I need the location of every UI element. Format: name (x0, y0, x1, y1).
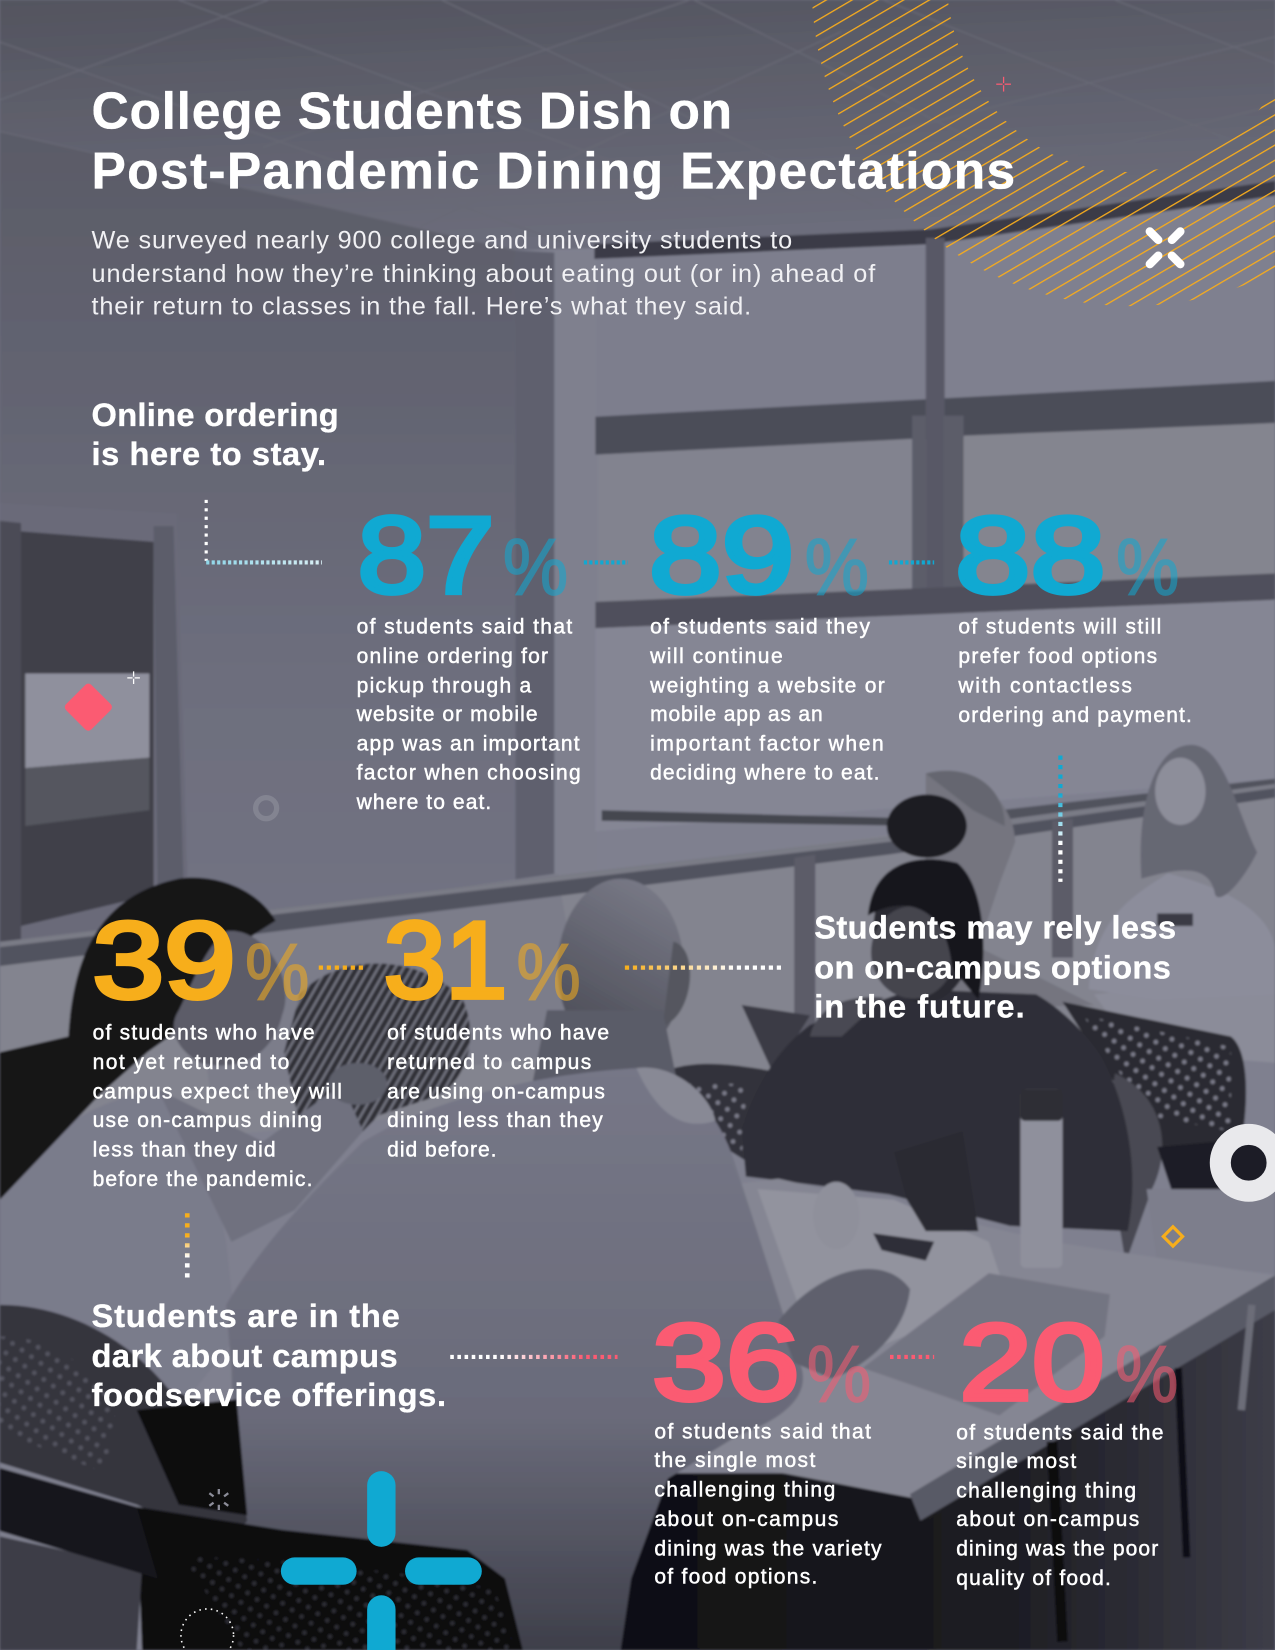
floor (589, 1294, 1275, 1650)
connector: 36 to 20 (890, 1355, 934, 1359)
stat: 39 percent (93, 900, 342, 1191)
central shirt (226, 1068, 803, 1650)
stat: 36 percent: about on-campus (654, 1508, 838, 1531)
stat: 87 percent: of students said that (357, 615, 572, 638)
stat: 31 percent (384, 900, 609, 1161)
stat: 39 percent: of students who have (93, 1022, 315, 1045)
connector: 89 to 88 (889, 560, 934, 564)
heading: foodservice offerings: foodservice offerings. (92, 1376, 446, 1413)
stat: 89 percent: % (805, 523, 869, 612)
stat: 20 percent: dining was the poor (956, 1537, 1158, 1560)
stat: 89 percent: will continue (649, 645, 783, 668)
table (771, 1177, 1130, 1500)
heading: foodservice offerings: Students are in the (92, 1297, 400, 1334)
stat: 87 percent: factor when choosing (357, 762, 581, 785)
decor: white crosshair (127, 671, 140, 684)
stat: 31 percent: % (517, 928, 581, 1017)
left chair (0, 1305, 247, 1547)
stat: 88 percent: 88 (955, 494, 1106, 615)
stat: 36 percent: of food options. (654, 1566, 817, 1589)
stat: 31 percent: 31 (384, 900, 507, 1021)
stat: 87 percent: 87 (358, 494, 494, 615)
left student (48, 1091, 180, 1152)
stat: 39 percent: before the pandemic. (93, 1168, 312, 1191)
bald man (557, 878, 682, 1029)
stat: 39 percent: not yet returned to (93, 1051, 289, 1074)
stat: 89 percent: important factor when (650, 732, 884, 755)
stat: 88 percent: of students will still (958, 615, 1161, 638)
connector: heading to 36 percent (450, 1355, 618, 1359)
stat: 31 percent: dining less than they (387, 1109, 603, 1132)
stat: 20 percent: quality of food. (956, 1567, 1111, 1590)
stat: 89 percent: deciding where to eat. (650, 762, 879, 785)
intro text: their return to classes in the fall. Here’s what they said. (92, 293, 751, 321)
decor: gray star burst (209, 1489, 228, 1510)
heading: on-campus options: Students may rely less (814, 909, 1176, 946)
decor: dotted circle (181, 1609, 234, 1650)
stat: 89 percent: mobile app as an (650, 703, 823, 726)
stat: 87 percent: website or mobile (356, 703, 538, 726)
heading: on-campus options: on on-campus options (814, 949, 1171, 986)
left wall (0, 132, 516, 910)
lower window panes (682, 438, 913, 451)
seat back lower (137, 1507, 523, 1650)
stat: 87 percent: where to eat. (356, 791, 491, 814)
stat: 87 percent (356, 494, 581, 814)
decor: faint ring (256, 798, 277, 819)
stat: 89 percent (649, 494, 885, 785)
decor: pink diamond (63, 682, 114, 732)
stat: 20 percent: about on-campus (956, 1508, 1139, 1531)
hand rail (0, 784, 1275, 966)
stat: 89 percent: weighting a website or (649, 674, 885, 697)
main window transom (595, 381, 1275, 455)
icon: blue plus mark (281, 1471, 482, 1650)
heading: online ordering: is here to stay. (92, 435, 326, 472)
stat: 31 percent: did before. (387, 1138, 497, 1161)
stat: 20 percent: single most (956, 1450, 1076, 1473)
headwrap (284, 963, 470, 1147)
stat: 31 percent: returned to campus (387, 1051, 591, 1074)
stat: 87 percent: pickup through a (357, 674, 532, 697)
ponytail student (926, 772, 1094, 1010)
ceiling (0, 0, 1275, 250)
stat: 36 percent (652, 1302, 882, 1589)
heading: online ordering: Online ordering (92, 396, 339, 433)
stat: 39 percent: 39 (93, 900, 236, 1021)
title: College Students Dish on (92, 81, 732, 139)
title (92, 81, 1015, 199)
decor: pink crosshair (996, 77, 1011, 92)
stat: 87 percent: % (503, 523, 568, 612)
stat: 20 percent (956, 1302, 1178, 1590)
stat: 36 percent: the single most (654, 1449, 815, 1472)
stat: 20 percent: 20 (959, 1302, 1105, 1423)
heading: foodservice offerings: dark about campus (92, 1337, 398, 1374)
decor: orange diamond outline (1163, 1227, 1183, 1246)
title: Post-Pandemic Dining Expectations (92, 141, 1015, 199)
connector: 31 to heading (625, 966, 784, 970)
stat: 89 percent: 89 (649, 494, 794, 615)
stat: 39 percent: less than they did (93, 1138, 276, 1161)
intro text (92, 226, 876, 321)
intro text: We surveyed nearly 900 college and university students to (92, 226, 792, 254)
intro text: understand how they’re thinking about eating out (or in) ahead of (92, 260, 876, 288)
stat: 39 percent: use on-campus dining (93, 1109, 322, 1132)
stat: 88 percent: with contactless (957, 674, 1132, 697)
connector: 88 down to heading (1058, 756, 1062, 882)
heading: foodservice offerings (92, 1297, 446, 1413)
right floor behind table (1146, 1187, 1275, 1211)
rear table and blonde student (1097, 994, 1274, 1062)
stat: 36 percent: dining was the variety (654, 1537, 882, 1560)
decor: orange striped arc (812, 0, 1275, 306)
upper window panes (596, 247, 926, 419)
stat: 88 percent: prefer food options (958, 645, 1157, 668)
door frame (22, 904, 120, 938)
connector: vertical orange (185, 1213, 189, 1277)
connector: 39 to 31 (319, 966, 366, 970)
wall below railing and glass (0, 800, 1144, 1032)
stat: 87 percent: app was an important (357, 732, 580, 755)
heading: on-campus options: in the future. (814, 988, 1025, 1025)
stat: 31 percent: are using on-campus (387, 1081, 605, 1104)
connector: heading to 87 percent (206, 500, 322, 562)
stat: 20 percent: % (1115, 1330, 1178, 1419)
stat: 39 percent: % (245, 928, 309, 1017)
beam at ceiling (594, 181, 1275, 259)
stat: 36 percent: % (807, 1330, 871, 1419)
decor: large white ring (1220, 1134, 1275, 1191)
stat: 20 percent: of students said the (956, 1422, 1163, 1445)
chairs behind (1062, 1001, 1248, 1148)
connector: 87 to 89 (584, 560, 628, 564)
stat: 31 percent: of students who have (387, 1022, 609, 1045)
stat: 87 percent: online ordering for (357, 645, 548, 668)
sill (595, 574, 1275, 628)
heading: on-campus options (814, 909, 1176, 1025)
stat: 39 percent: campus expect they will (93, 1081, 342, 1104)
stat: 88 percent: ordering and payment. (958, 704, 1192, 727)
stat: 88 percent: % (1116, 523, 1179, 612)
stat: 89 percent: of students said they (650, 615, 870, 638)
stat: 88 percent (955, 494, 1192, 727)
stat: 36 percent: 36 (652, 1302, 800, 1423)
stat: 36 percent: of students said that (654, 1420, 871, 1443)
heading: online ordering (92, 396, 339, 472)
stat: 36 percent: challenging thing (654, 1478, 835, 1501)
chips bag and water bottle (906, 1196, 980, 1232)
stat: 20 percent: challenging thing (956, 1479, 1136, 1502)
icon: white X mark (1150, 232, 1180, 264)
dark jacket student (742, 989, 1132, 1231)
